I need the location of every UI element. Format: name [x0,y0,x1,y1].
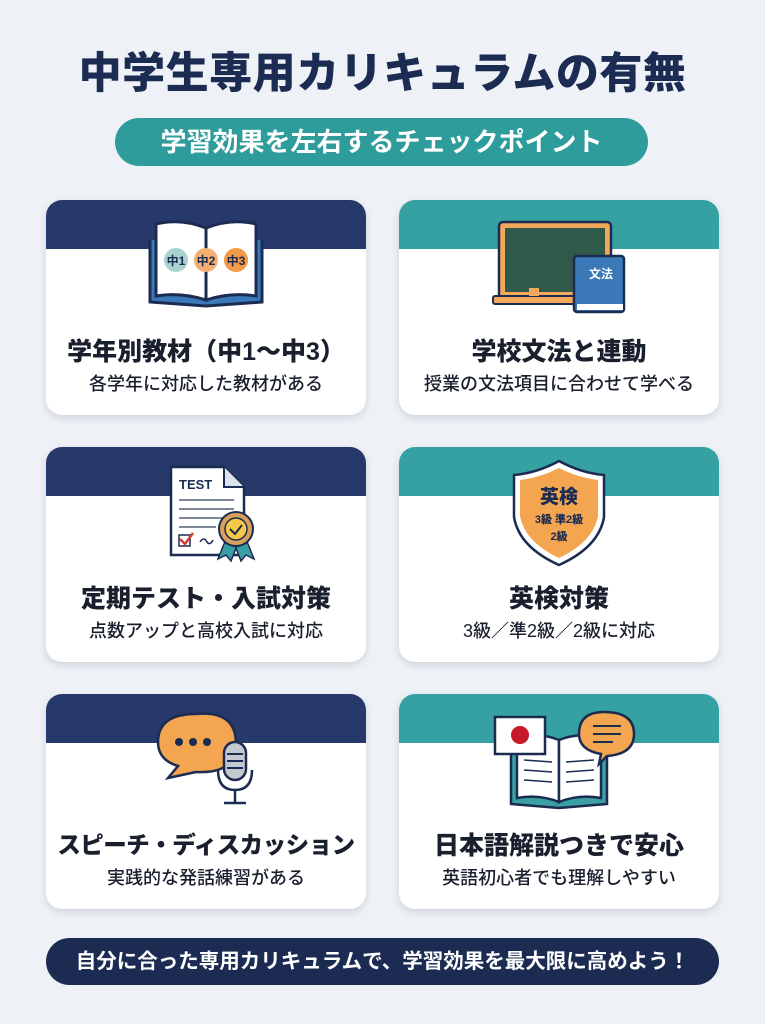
panel: speech [46,694,366,909]
panel: school grammar [399,200,719,415]
icon: eiken shield: 英検 [540,486,578,508]
icon: eiken shield [512,460,606,566]
subtitle pill [115,118,648,166]
card title: 学年別教材（中1〜中3） [67,338,345,366]
card text: 点数アップと高校入試に対応 [89,621,323,641]
icon: eiken shield: 3級 準2級 [535,512,583,526]
icon: book with grades: 中2 [197,253,216,268]
panel: japanese explanations [399,694,719,909]
icon: book with grades: 中3 [227,253,246,268]
card title: 学校文法と連動 [471,338,646,366]
footer banner: 自分に合った専用カリキュラムで、学習効果を最大限に高めよう！ [76,950,689,973]
icon: eiken shield: 2級 [550,529,568,543]
icon: chalkboard and grammar book [492,220,626,314]
icon: speech bubble and mic [156,712,254,804]
subtitle pill: 学習効果を左右するチェックポイント [160,127,602,157]
card text: 各学年に対応した教材がある [89,374,323,394]
card title: スピーチ・ディスカッション [57,832,355,858]
footer banner [46,938,719,985]
icon: test paper with rosette [170,466,256,562]
panel: eiken [399,447,719,662]
icon: book with flag and bubble [494,710,636,810]
icon: test paper with rosette: TEST [179,477,212,492]
icon: chalkboard and grammar book: 文法 [589,266,613,281]
title: 中学生専用カリキュラムの有無 [79,50,686,98]
card text: 授業の文法項目に合わせて学べる [424,374,694,394]
card title: 日本語解説つきで安心 [434,832,684,860]
card title: 定期テスト・入試対策 [81,585,331,613]
card text: 英語初心者でも理解しやすい [442,868,676,888]
card text: 3級／準2級／2級に対応 [463,621,655,641]
panel: tests [46,447,366,662]
card text: 実践的な発話練習がある [107,868,305,888]
icon: book with grades: 中1 [167,253,186,268]
panel: grade materials [46,200,366,415]
icon: book with grades [148,220,264,308]
card title: 英検対策 [509,585,609,613]
